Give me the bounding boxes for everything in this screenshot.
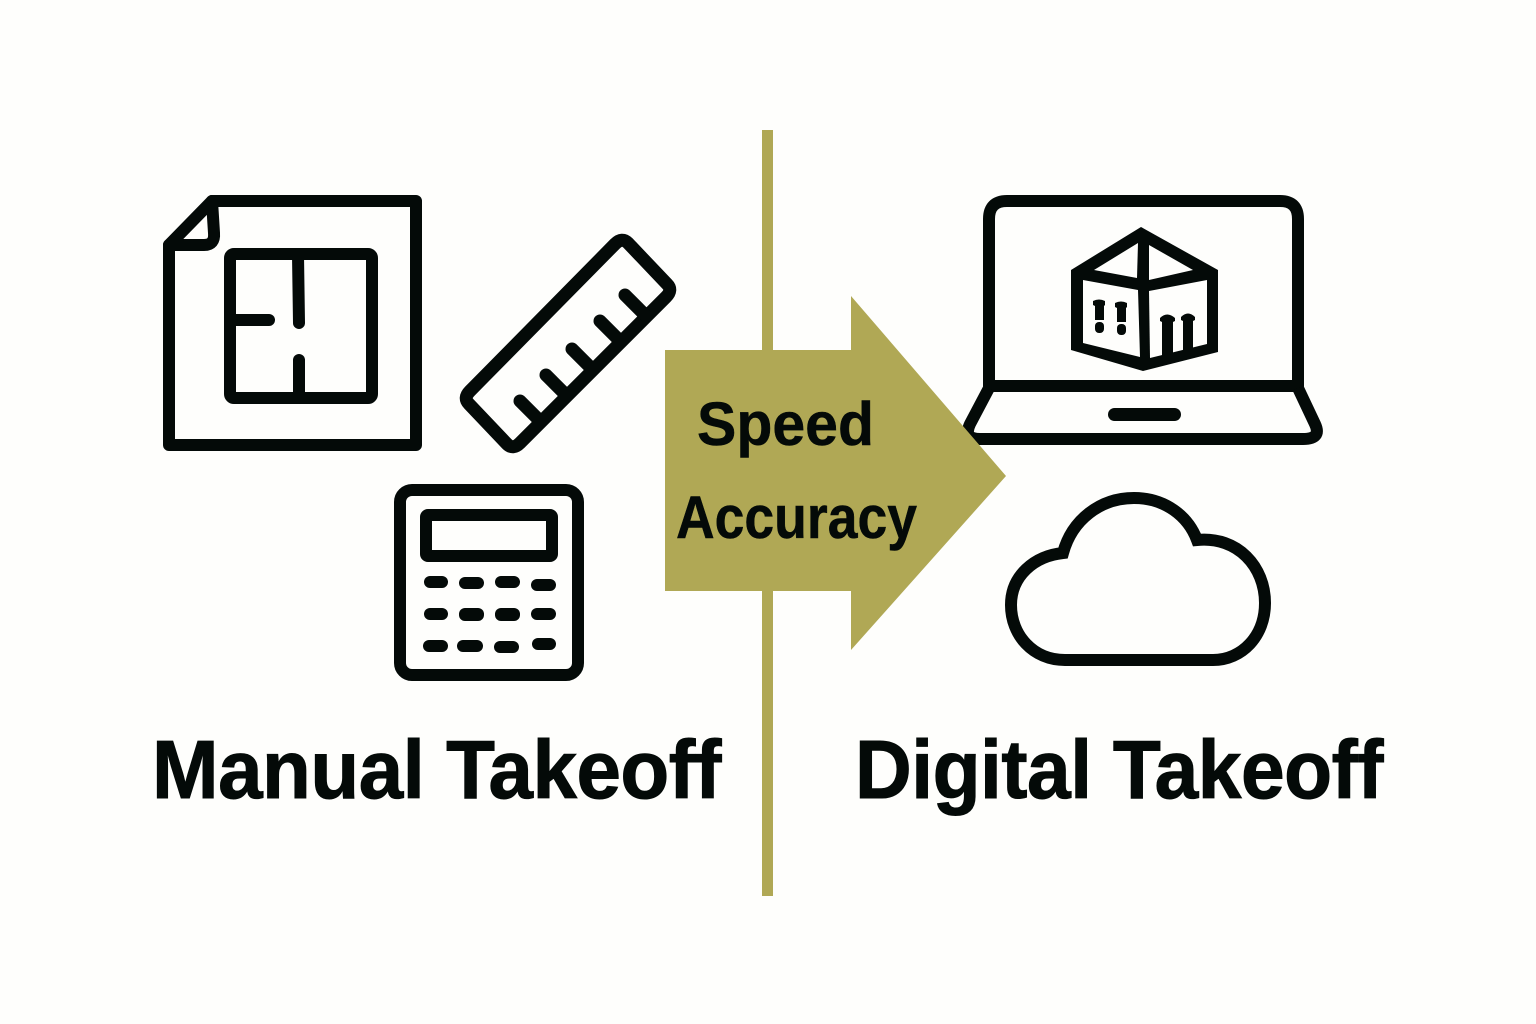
- arrow: speed and accuracy: [665, 296, 1006, 650]
- icon: laptop: [968, 201, 1317, 439]
- heading: Manual Takeoff: Manual Takeoff: [152, 723, 722, 816]
- icon: blueprint floor plan sheet: [169, 201, 416, 445]
- arrow label: Speed: Speed: [697, 390, 874, 458]
- icon: 3D building model: [1071, 227, 1218, 371]
- heading: Digital Takeoff: Digital Takeoff: [855, 723, 1384, 816]
- icon: calculator: [400, 490, 578, 675]
- icon: cloud: [1011, 498, 1265, 660]
- icon: floor plan rooms: [230, 254, 372, 398]
- icon: ruler: [466, 240, 670, 447]
- vertical divider line: [762, 130, 773, 896]
- arrow label: Accuracy: Accuracy: [676, 484, 918, 551]
